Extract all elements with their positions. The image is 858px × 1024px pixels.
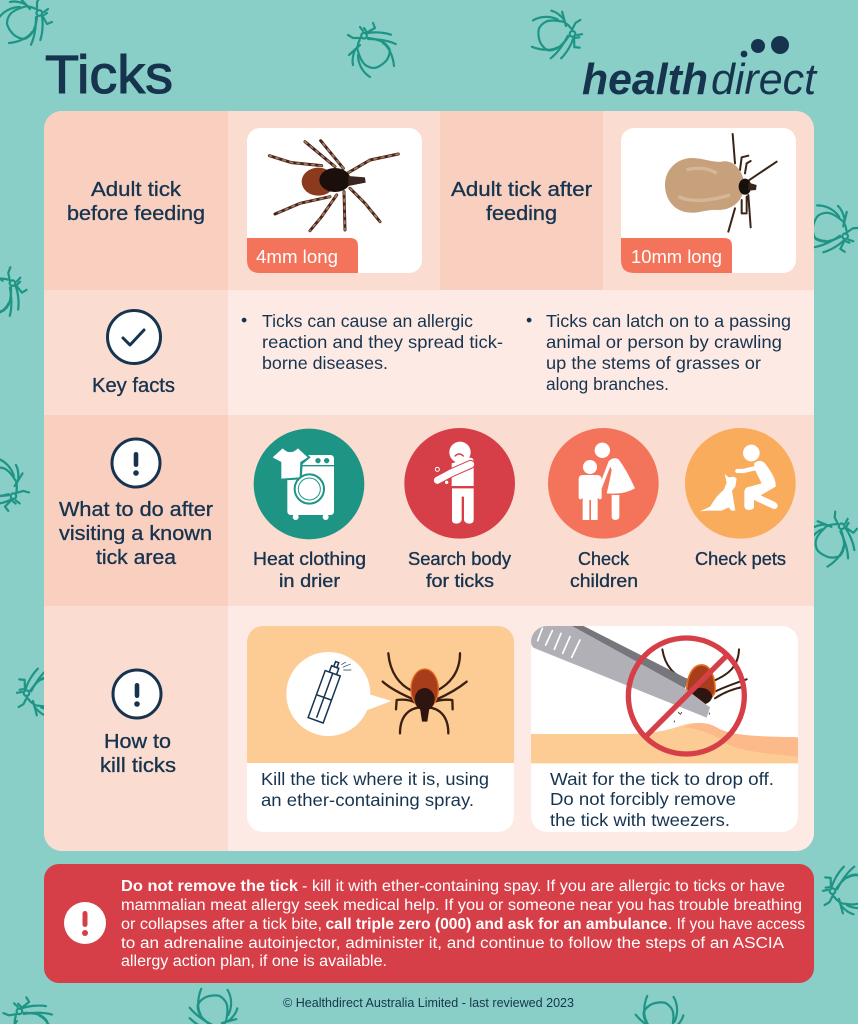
key fact: allergic reaction: borne diseases. xyxy=(262,353,388,373)
key fact: allergic reaction: • xyxy=(241,310,247,330)
label: search body: for ticks xyxy=(426,570,494,591)
icon: exclamation xyxy=(112,439,160,487)
illustration: no tweezers xyxy=(531,625,798,763)
key fact: allergic reaction: Ticks can cause an allergic xyxy=(262,311,473,331)
logo: healthdirect xyxy=(582,36,818,104)
caption: kill the tick: an ether-containing spray. xyxy=(261,790,474,810)
footer: © Healthdirect Australia Limited - last reviewed 2023 xyxy=(283,996,574,1010)
icon: exclamation xyxy=(113,670,161,718)
alert text: . If you have access xyxy=(668,916,805,933)
label: check children: children xyxy=(570,570,638,591)
alert text: call triple zero (000) and ask for an ambulance xyxy=(326,916,668,933)
caption: wait for tick to drop off: the tick with tweezers. xyxy=(550,810,730,830)
label: check children: Check xyxy=(578,548,630,569)
card: tick before feeding xyxy=(247,128,422,273)
tag: 4mm long xyxy=(247,238,358,273)
alert text: - kill it with ether-containing spay. If you are allergic to ticks or have xyxy=(302,878,785,895)
row label: what to do: What to do after xyxy=(59,498,213,521)
row label: how to kill ticks: How to xyxy=(104,730,171,753)
row label: how to kill ticks xyxy=(100,670,176,777)
label: check pets: Check pets xyxy=(695,548,786,569)
icon: alert xyxy=(64,902,106,944)
alert text: mammalian meat allergy seek medical help. If you or someone near you has trouble breathing xyxy=(121,897,802,914)
key fact: latch on: animal or person by crawling xyxy=(546,332,782,352)
illustration: spray and tick xyxy=(286,652,467,736)
key fact: latch on: up the stems of grasses or xyxy=(546,353,761,373)
icon: check mark xyxy=(108,310,160,364)
card: kill with spray xyxy=(247,626,514,832)
tag: 10mm long xyxy=(621,238,732,273)
label: search body: Search body xyxy=(408,548,512,569)
icon: person checking pet xyxy=(685,428,796,539)
main panel xyxy=(44,111,814,851)
card: tick after feeding xyxy=(621,128,796,273)
row label: key facts: Key facts xyxy=(92,374,175,397)
alert panel xyxy=(44,864,814,983)
key fact: latch on: • xyxy=(526,310,532,330)
row label: how to kill ticks: kill ticks xyxy=(100,754,176,777)
row label: what to do: tick area xyxy=(96,546,177,569)
logo: healthdirect: direct xyxy=(711,55,818,104)
row label: adult tick after feeding xyxy=(451,178,592,225)
key fact: latch on: Ticks can latch on to a passing xyxy=(546,311,791,331)
label: search body xyxy=(408,548,512,591)
row label: adult tick after feeding: Adult tick after xyxy=(451,178,592,201)
alert text: allergy action plan, if one is available. xyxy=(121,953,387,970)
tag: 4mm long: 4mm long xyxy=(256,246,338,267)
label: heat clothing xyxy=(253,548,366,591)
card: do not use tweezers xyxy=(531,625,798,832)
caption: wait for tick to drop off: Wait for the tick to drop off. xyxy=(550,769,774,789)
key fact: latch on xyxy=(526,310,791,394)
label: check children xyxy=(570,548,638,591)
label: heat clothing: Heat clothing xyxy=(253,548,366,569)
row label: key facts xyxy=(92,310,175,397)
row label: what to do: visiting a known xyxy=(59,522,212,545)
row label: adult tick before feeding xyxy=(67,178,205,225)
alert text: to an adrenaline autoinjector, administer it, and continue to follow the steps of an ASCIA xyxy=(121,935,785,952)
icon: adult checking child xyxy=(548,428,659,539)
icon: person searching body xyxy=(404,428,515,539)
key fact: allergic reaction xyxy=(241,310,503,373)
icon: washing machine and shirt xyxy=(254,429,364,539)
label: heat clothing: in drier xyxy=(279,570,340,591)
photo: engorged tick xyxy=(665,134,777,232)
row label: adult tick before feeding: before feeding xyxy=(67,202,205,225)
alert text: or collapses after a tick bite, xyxy=(121,916,322,933)
caption: wait for tick to drop off xyxy=(550,769,774,830)
key fact: allergic reaction: reaction and they spread tick- xyxy=(262,332,503,352)
photo: unfed tick xyxy=(269,141,398,231)
key fact: latch on: along branches. xyxy=(546,374,669,394)
row label: what to do xyxy=(59,439,213,569)
alert text xyxy=(121,878,805,970)
title: Ticks xyxy=(45,45,173,105)
caption: wait for tick to drop off: Do not forcibly remove xyxy=(550,789,736,809)
tag: 10mm long: 10mm long xyxy=(631,246,722,267)
caption: kill the tick: Kill the tick where it is, using xyxy=(261,769,489,789)
caption: kill the tick xyxy=(261,769,489,810)
logo: healthdirect: health xyxy=(582,55,708,104)
alert text: Do not remove the tick xyxy=(121,878,298,895)
row label: adult tick after feeding: feeding xyxy=(486,202,557,225)
row label: adult tick before feeding: Adult tick xyxy=(91,178,182,201)
